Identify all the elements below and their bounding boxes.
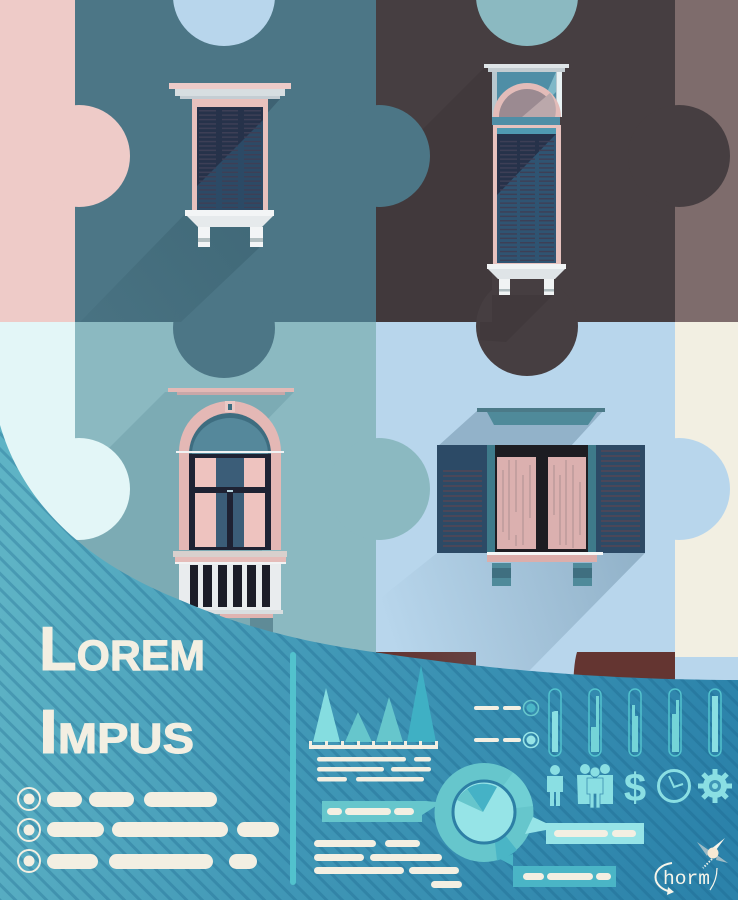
long shadow: window 3 (60, 392, 294, 640)
icon: clock (658, 770, 690, 802)
capsule gauges (549, 689, 721, 756)
logo: horm (663, 868, 710, 890)
puzzle knobs (28, 0, 730, 540)
long shadow: window 1 (80, 213, 262, 322)
title: Lorem (39, 615, 205, 684)
donut chart (434, 763, 534, 862)
bullet list placeholder rows (18, 788, 279, 872)
logo (656, 838, 728, 895)
text lines below callout (314, 840, 462, 888)
callout left (322, 801, 436, 822)
curved striped info panel (0, 425, 738, 900)
legend lines with nodes (474, 700, 538, 748)
window 3: arched balcony window (168, 388, 294, 634)
title: Impus (39, 698, 194, 767)
puzzle background (0, 0, 738, 700)
vertical divider bar (290, 652, 296, 885)
icon: person (547, 765, 563, 806)
long shadow: window 4 cornice (437, 410, 604, 447)
icon: group of people (577, 764, 613, 808)
long shadow: window 2 lower (480, 295, 553, 342)
window 1: rectangular shuttered window (169, 83, 291, 247)
title (39, 615, 205, 767)
icon: dollar sign: $ (624, 766, 646, 810)
long shadow: window 2 upper (376, 66, 492, 322)
window 2: tall arched window (484, 64, 569, 295)
long shadow: window 4 sill (378, 553, 645, 670)
triangle chart (309, 665, 438, 749)
callout lower right (500, 854, 616, 887)
window 4: window with open shutters (437, 408, 645, 586)
chart caption lines (317, 757, 431, 782)
icon: gear (698, 769, 732, 803)
callout upper right (525, 817, 644, 844)
